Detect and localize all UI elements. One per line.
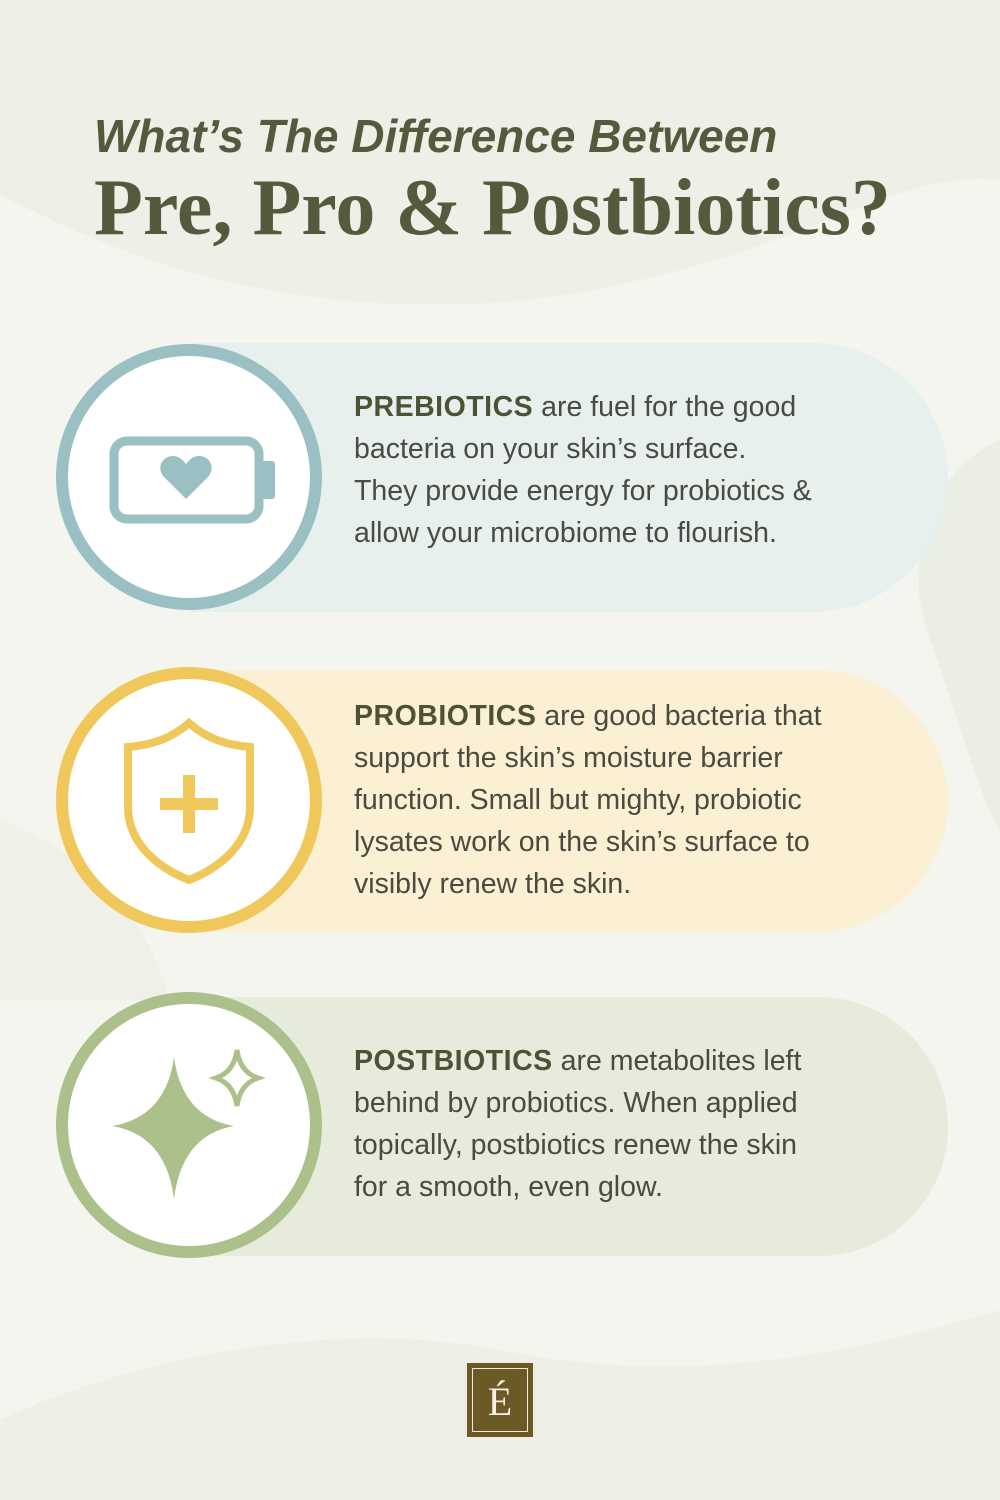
- icon: shield plus: [56, 667, 322, 933]
- text: prebiotics: allow your microbiome to flourish.: [354, 517, 777, 549]
- text: prebiotics: [354, 391, 812, 549]
- title: What’s The Difference Between: [94, 110, 777, 162]
- text: prebiotics: They provide energy for probiotics &: [354, 475, 812, 507]
- title: [94, 110, 891, 252]
- text: probiotics: lysates work on the skin’s surface to: [354, 826, 810, 858]
- text: postbiotics: behind by probiotics. When applied: [354, 1087, 798, 1119]
- title: Pre, Pro & Postbiotics?: [94, 164, 891, 252]
- text: probiotics: [354, 700, 822, 900]
- text: postbiotics: POSTBIOTICS are metabolites left: [354, 1045, 801, 1077]
- text: probiotics: support the skin’s moisture barrier: [354, 742, 783, 774]
- icon: sparkle: [56, 992, 322, 1258]
- text: postbiotics: for a smooth, even glow.: [354, 1171, 663, 1203]
- logo: [467, 1363, 533, 1437]
- text: postbiotics: topically, postbiotics renew the skin: [354, 1129, 797, 1161]
- text: prebiotics: bacteria on your skin’s surface.: [354, 433, 746, 465]
- text: probiotics: function. Small but mighty, probiotic: [354, 784, 802, 816]
- panel: probiotics: [56, 667, 948, 933]
- icon: battery heart: [56, 344, 322, 610]
- logo: É: [488, 1379, 512, 1424]
- text: postbiotics: [354, 1045, 802, 1203]
- text: prebiotics: PREBIOTICS are fuel for the good: [354, 391, 796, 423]
- text: probiotics: PROBIOTICS are good bacteria that: [354, 700, 822, 732]
- panel: postbiotics: [56, 992, 948, 1258]
- panel: prebiotics: [56, 343, 948, 612]
- text: probiotics: visibly renew the skin.: [354, 868, 631, 900]
